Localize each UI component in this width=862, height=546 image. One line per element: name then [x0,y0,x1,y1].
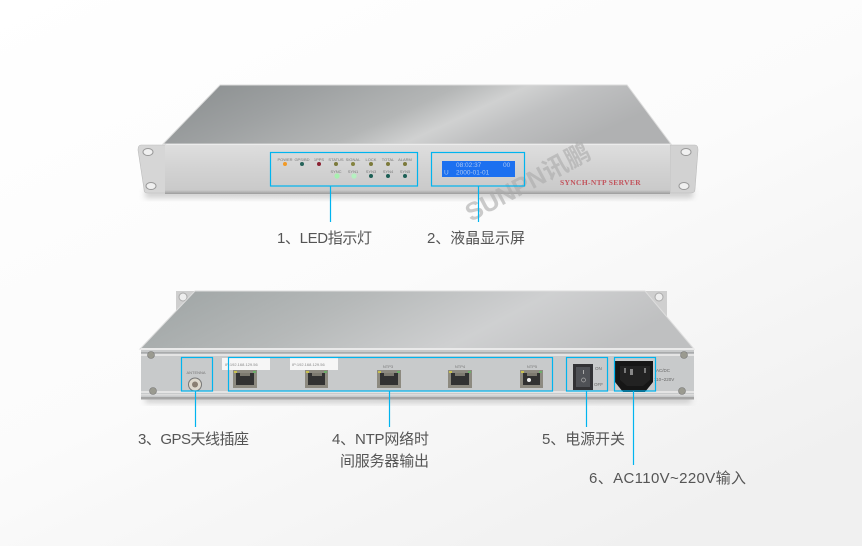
LED labels and lights: SYN4 [383,169,394,174]
LCD screen: 00 [503,162,511,169]
LED labels and lights [277,157,412,179]
front view device [138,85,698,227]
rear ears [176,291,196,312]
rocker switch [573,364,603,390]
LED labels and lights: 1PPS [314,157,324,162]
LED labels and lights: ALARM [398,157,412,162]
rear shadow [145,396,691,403]
right mounting ear [670,145,698,193]
LCD screen: 2000-01-01 [456,170,490,176]
callout: power input box [614,358,656,391]
LCD screen [442,161,515,177]
device shadow [145,190,693,198]
callout: antenna box [182,358,212,391]
callout: LCD box [432,152,524,186]
rocker switch: ON [595,366,602,371]
LED labels and lights: TOTAL [382,157,395,162]
rear top cover [140,291,694,349]
rear view device: NTP4 [455,364,466,369]
screws [148,352,154,358]
LED labels and lights: LOCK [366,157,377,162]
watermark: SUNPN讯鹏 [461,138,595,227]
panel ridges [141,348,694,350]
NTP5 port highlight [527,378,531,382]
label 4: 间服务器输出 [340,453,429,470]
LED labels and lights: SIGNAL [346,157,361,162]
label 4 [332,431,429,470]
brand label: SYNCH-NTP SERVER [560,178,641,187]
LED labels and lights: SYN5 [400,169,411,174]
label 5: 5、电源开关 [542,431,625,448]
rear panel [141,348,694,399]
power socket: AC/DC [656,368,671,373]
LCD screen: U [444,170,449,176]
leader: antenna [194,391,196,427]
rear view device: NTP3 [383,364,394,369]
antenna connector [186,370,206,391]
leader: LED [330,186,332,222]
rear view device: IP:192.168.129.56 [225,362,258,367]
rear view device: NTP5 [527,364,538,369]
label 2: 2、液晶显示屏 [427,230,525,247]
power socket: 110~220V [654,377,674,382]
leader: power input [632,391,634,465]
power socket [615,361,674,392]
left mounting ear [138,145,166,193]
LED labels and lights: POWER [277,157,293,162]
LED labels and lights: GPS/BD [294,157,310,162]
LED labels and lights: SYN3 [366,169,377,174]
label 6: 6、AC110V~220V输入 [589,470,746,487]
callout: LED box [270,152,418,186]
antenna connector: ANTENNA [186,370,206,375]
callout: power switch box [566,358,608,391]
LED labels and lights: SYN1 [348,169,359,174]
rocker switch: OFF [594,382,603,387]
leader: LCD [478,186,480,222]
LCD screen: 08:02:37 [456,162,482,169]
LED labels and lights: STATUS [328,157,344,162]
label 3: 3、GPS天线插座 [138,431,249,448]
LED labels and lights: SYNC [330,169,342,174]
leader: network [388,391,390,427]
front panel [165,145,670,194]
callout: network ports box [228,358,552,391]
leader: switch [586,391,588,427]
IP stickers [222,358,270,370]
RJ45 ports [233,370,543,388]
label 4: 4、NTP网络时 [332,431,429,448]
rear view device: IP:192.168.129.56 [292,362,325,367]
top cover [163,85,671,144]
rear view device [140,291,694,403]
label 1: 1、LED指示灯 [277,230,372,247]
